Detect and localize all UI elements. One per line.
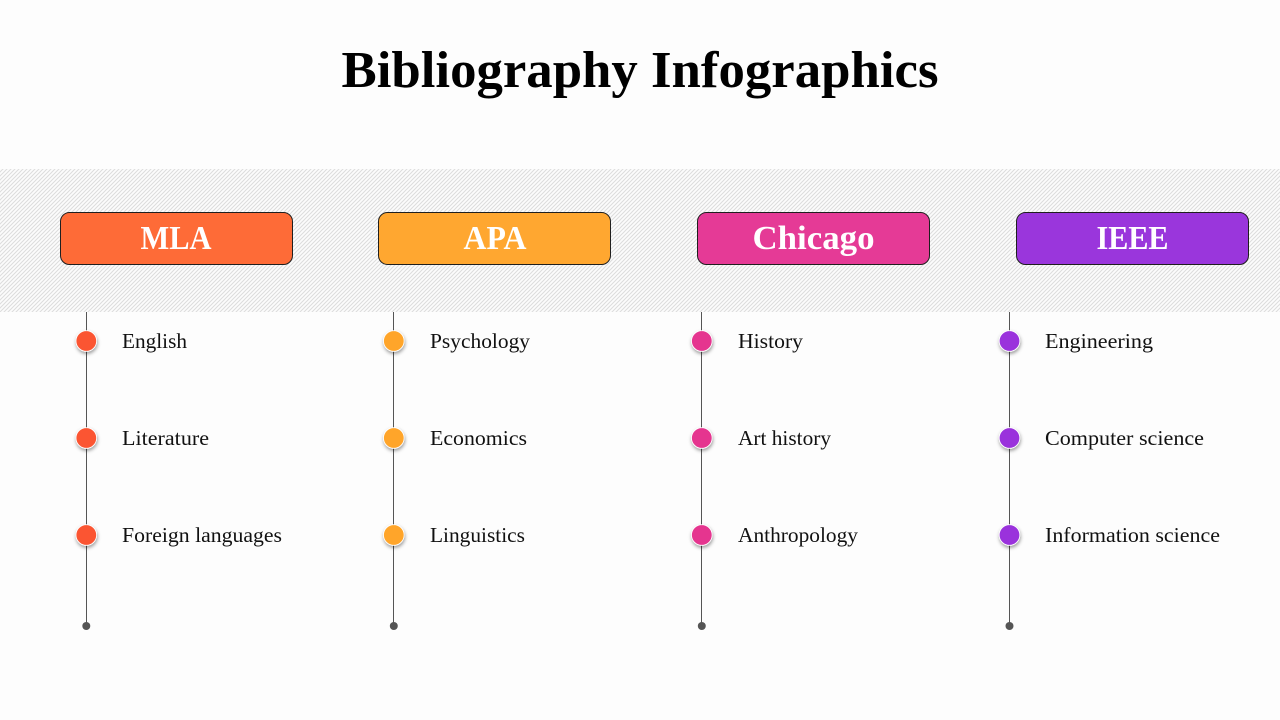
list: MLA subjects — [122, 329, 282, 547]
list: APA subjects: Linguistics — [430, 523, 525, 547]
header: IEEE: IEEE — [1096, 220, 1168, 257]
list: Chicago subjects: Anthropology — [738, 523, 859, 547]
panel: Chicago — [692, 212, 930, 630]
title: Bibliography Infographics — [342, 42, 938, 99]
list: IEEE subjects: Computer science — [1045, 426, 1204, 450]
hatched band — [0, 169, 1280, 312]
header: Chicago — [698, 212, 930, 264]
header: APA — [378, 212, 610, 264]
list: APA subjects: Economics — [430, 426, 527, 450]
timeline: Chicago — [692, 312, 712, 630]
timeline: MLA — [76, 312, 97, 630]
panel: MLA — [60, 212, 292, 630]
list: MLA subjects: Foreign languages — [122, 523, 282, 547]
panel: IEEE — [999, 212, 1248, 630]
header: MLA: MLA — [140, 220, 212, 257]
timeline: APA — [384, 312, 404, 630]
list: Chicago subjects: History — [738, 329, 804, 353]
list: APA subjects — [430, 329, 531, 547]
list: IEEE subjects — [1045, 329, 1220, 547]
header: Chicago: Chicago — [752, 220, 874, 257]
list: Chicago subjects: Art history — [738, 426, 832, 450]
list: MLA subjects: English — [122, 329, 188, 353]
list: Chicago subjects — [738, 329, 859, 547]
list: IEEE subjects: Engineering — [1045, 329, 1154, 353]
timeline: IEEE — [999, 312, 1020, 630]
header: MLA — [60, 212, 292, 264]
list: APA subjects: Psychology — [430, 329, 531, 353]
list: MLA subjects: Literature — [122, 426, 209, 450]
panel: APA — [378, 212, 610, 630]
header: IEEE — [1016, 212, 1248, 264]
header: APA: APA — [464, 220, 527, 257]
list: IEEE subjects: Information science — [1045, 523, 1220, 547]
